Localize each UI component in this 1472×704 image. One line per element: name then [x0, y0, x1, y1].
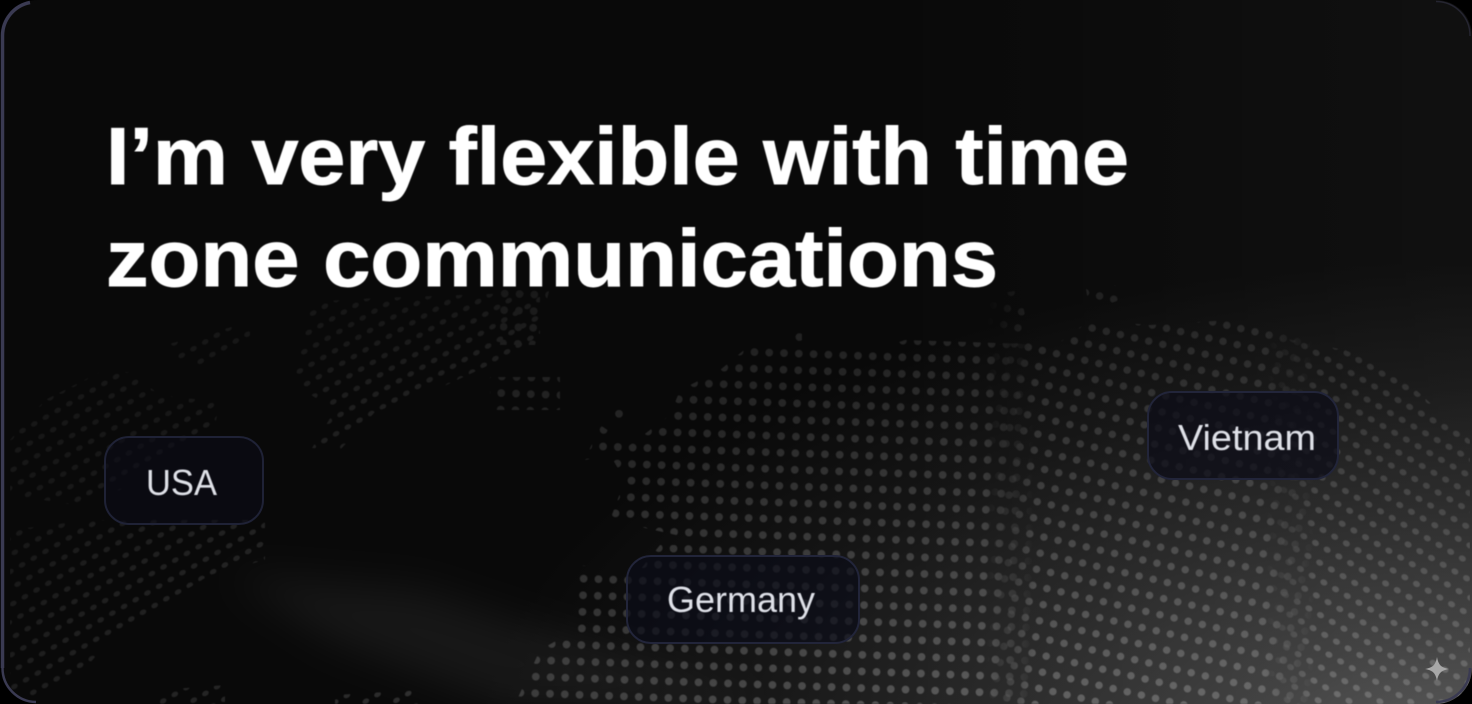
location tag: USA — [105, 437, 263, 524]
location tag: Germany — [627, 556, 859, 643]
east asia dots — [995, 289, 1303, 704]
title: I’m very flexible with time — [106, 112, 1129, 202]
atlantic islands dots — [496, 290, 560, 410]
north america dots — [10, 292, 540, 704]
eurasia and africa dots — [515, 330, 1060, 704]
title — [106, 112, 1129, 304]
location tag: Germany: Germany — [667, 579, 815, 620]
location tag: Vietnam: Vietnam — [1178, 417, 1316, 458]
title: zone communications — [106, 214, 998, 304]
location tag: Vietnam — [1148, 392, 1338, 479]
location tag: USA: USA — [146, 462, 217, 503]
icon: sparkle — [1425, 657, 1449, 681]
pacific edge dots — [1276, 340, 1470, 704]
dotted world map — [10, 285, 1470, 704]
